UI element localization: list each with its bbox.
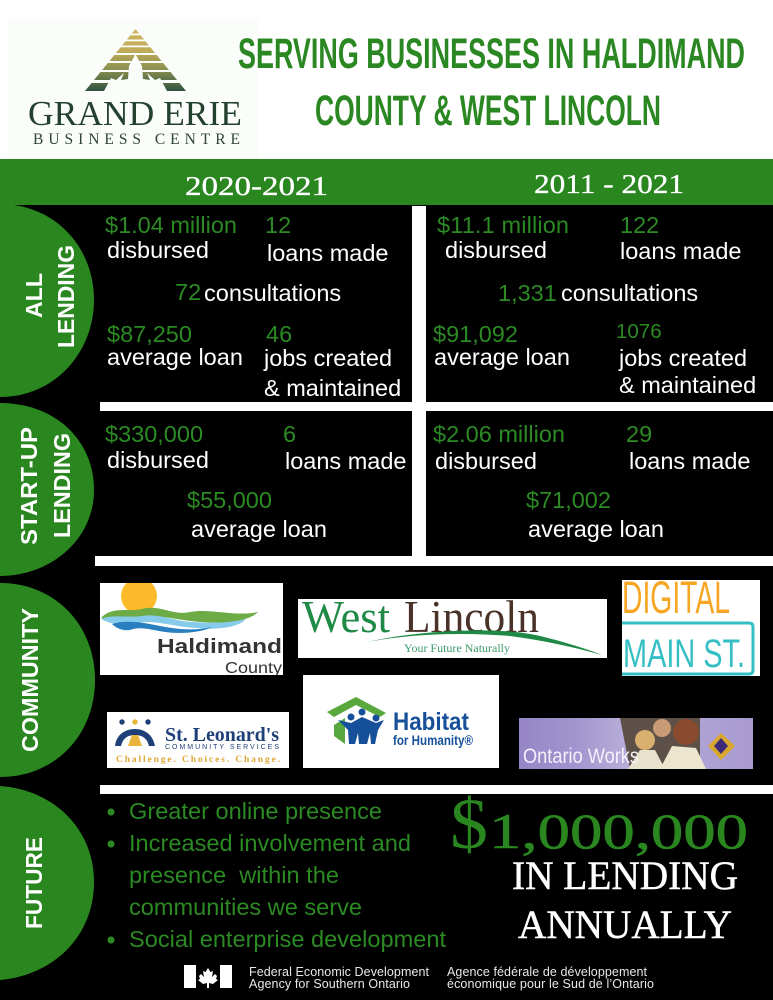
logo: St. Leonard's Community Services: Challenge. Choices. Change. — [116, 755, 280, 765]
future bullet list: Greater online presence — [129, 798, 382, 824]
logo: St. Leonard's Community Services: COMMUNITY SERVICES — [165, 744, 279, 751]
panel: start-up lending 2020-2021: disbursed — [107, 447, 209, 473]
panel: all lending 2011-2021: jobs created — [618, 345, 747, 371]
footer: agency wordmark — [249, 965, 654, 991]
panel: all lending 2020-2021: jobs created — [263, 345, 392, 371]
logo: Haldimand County — [100, 578, 283, 677]
section tab: start-up lending: LENDING — [49, 433, 75, 538]
callout: $1,000,000 in lending annually: $ — [450, 784, 488, 864]
header band — [0, 0, 773, 205]
panel: start-up lending 2011-2021 — [433, 421, 750, 542]
footer: agency wordmark: Agency for Southern Ontario — [249, 977, 410, 991]
future bullet list — [108, 798, 446, 952]
logo: Grand Erie Business Centre — [8, 18, 258, 159]
panel: all lending 2020-2021: consultations — [204, 280, 341, 306]
logo: Grand Erie Business Centre: BUSINESS CENTRE — [33, 131, 240, 148]
panel: all lending 2020-2021: $87,250 — [107, 321, 192, 347]
panel: start-up lending 2011-2021: $2.06 million — [433, 421, 565, 447]
logo: West Lincoln: West — [302, 591, 390, 642]
panel: start-up lending 2020-2021: loans made — [285, 448, 406, 474]
section tab: start-up lending — [0, 403, 94, 576]
section tab: future — [0, 786, 94, 980]
footer: agency wordmark: Agence fédérale de développement — [447, 965, 648, 979]
logo: Digital Main St. — [620, 572, 760, 676]
logo: Ontario Works — [519, 718, 753, 769]
logo: Haldimand County: County — [225, 660, 282, 677]
title — [238, 30, 745, 135]
column heading: 2011 - 2021: 2011 - 2021 — [534, 169, 684, 199]
logo: Grand Erie Business Centre: GRAND ERIE — [28, 94, 242, 133]
section tab: all lending — [0, 205, 94, 397]
panel: all lending 2011-2021: 122 — [620, 212, 659, 238]
panel: all lending 2011-2021: & maintained — [619, 372, 756, 398]
panel: all lending 2020-2021: loans made — [267, 240, 388, 266]
panel: all lending 2011-2021: $11.1 million — [437, 212, 569, 238]
panel: all lending 2020-2021: 72 — [175, 279, 201, 305]
panel: all lending 2020-2021: $1.04 million — [105, 212, 237, 238]
panel: all lending 2011-2021: 1076 — [616, 320, 662, 343]
panel: all lending 2011-2021 — [433, 212, 756, 398]
panel: all lending 2011-2021: 1,331 — [498, 280, 557, 306]
icon: Canadian flag — [184, 965, 232, 988]
footer: agency wordmark: économique pour le Sud de l’Ontario — [447, 977, 654, 991]
section tab: community: COMMUNITY — [17, 608, 43, 752]
panel: start-up lending 2020-2021: $55,000 — [187, 487, 272, 513]
future bullet list: Social enterprise development — [129, 926, 446, 952]
panel: all lending 2011-2021: loans made — [620, 238, 742, 264]
panel: all lending 2020-2021: 12 — [265, 212, 291, 238]
section tab: start-up lending: START-UP — [16, 427, 42, 545]
panel: start-up lending 2011-2021: 29 — [626, 421, 652, 447]
panel: all lending 2020-2021: 46 — [266, 321, 292, 347]
panel: start-up lending 2011-2021: loans made — [629, 448, 750, 474]
panel: all lending 2011-2021: consultations — [561, 280, 698, 306]
section tab: all lending: ALL — [21, 273, 47, 318]
logo: St. Leonard's Community Services: St. Leonard's — [165, 724, 279, 746]
section tab: community — [0, 583, 95, 777]
white divider grid — [95, 206, 773, 794]
future bullet list: Increased involvement and — [129, 830, 411, 856]
callout: $1,000,000 in lending annually: ANNUALLY — [518, 902, 732, 947]
panel: start-up lending 2020-2021: $330,000 — [105, 421, 203, 447]
section tab: future: FUTURE — [21, 837, 47, 929]
logo: Habitat for Humanity: for Humanity® — [393, 732, 474, 748]
logo: Haldimand County: Haldimand — [157, 636, 282, 658]
column heading: 2020-2021: 2020-2021 — [185, 171, 328, 201]
logo: West Lincoln — [298, 591, 607, 658]
logo: St. Leonard's Community Services — [107, 712, 289, 768]
panel: all lending 2020-2021 — [105, 212, 401, 401]
logo: West Lincoln: Lincoln — [404, 591, 539, 642]
section tab: all lending: LENDING — [53, 245, 79, 348]
logo: West Lincoln: Your Future Naturally — [404, 641, 510, 655]
panel: start-up lending 2020-2021 — [105, 421, 406, 542]
logo: Ontario Works: Ontario Works — [523, 745, 639, 768]
panel: start-up lending 2020-2021: 6 — [283, 421, 296, 447]
panel: all lending 2020-2021: disbursed — [107, 237, 209, 263]
future bullet list: communities we serve — [129, 894, 362, 920]
callout: $1,000,000 in lending annually — [450, 784, 748, 947]
panel: all lending 2020-2021: average loan — [107, 344, 243, 370]
footer: agency wordmark: Federal Economic Development — [249, 965, 430, 979]
panel: start-up lending 2011-2021: $71,002 — [526, 487, 611, 513]
panel: start-up lending 2011-2021: average loan — [528, 516, 664, 542]
callout: $1,000,000 in lending annually: 1,000,000 — [489, 803, 748, 859]
logo: Habitat for Humanity — [303, 675, 499, 768]
panel: all lending 2011-2021: $91,092 — [433, 321, 518, 347]
panel: start-up lending 2020-2021: average loan — [191, 516, 327, 542]
panel: start-up lending 2011-2021: disbursed — [435, 448, 537, 474]
panel: all lending 2011-2021: average loan — [434, 344, 570, 370]
panel: all lending 2020-2021: & maintained — [264, 375, 401, 401]
logo: Habitat for Humanity: Habitat — [393, 708, 470, 736]
panel: all lending 2011-2021: disbursed — [445, 237, 547, 263]
callout: $1,000,000 in lending annually: IN LENDING — [512, 853, 738, 898]
future bullet list: presence within the — [129, 862, 339, 888]
